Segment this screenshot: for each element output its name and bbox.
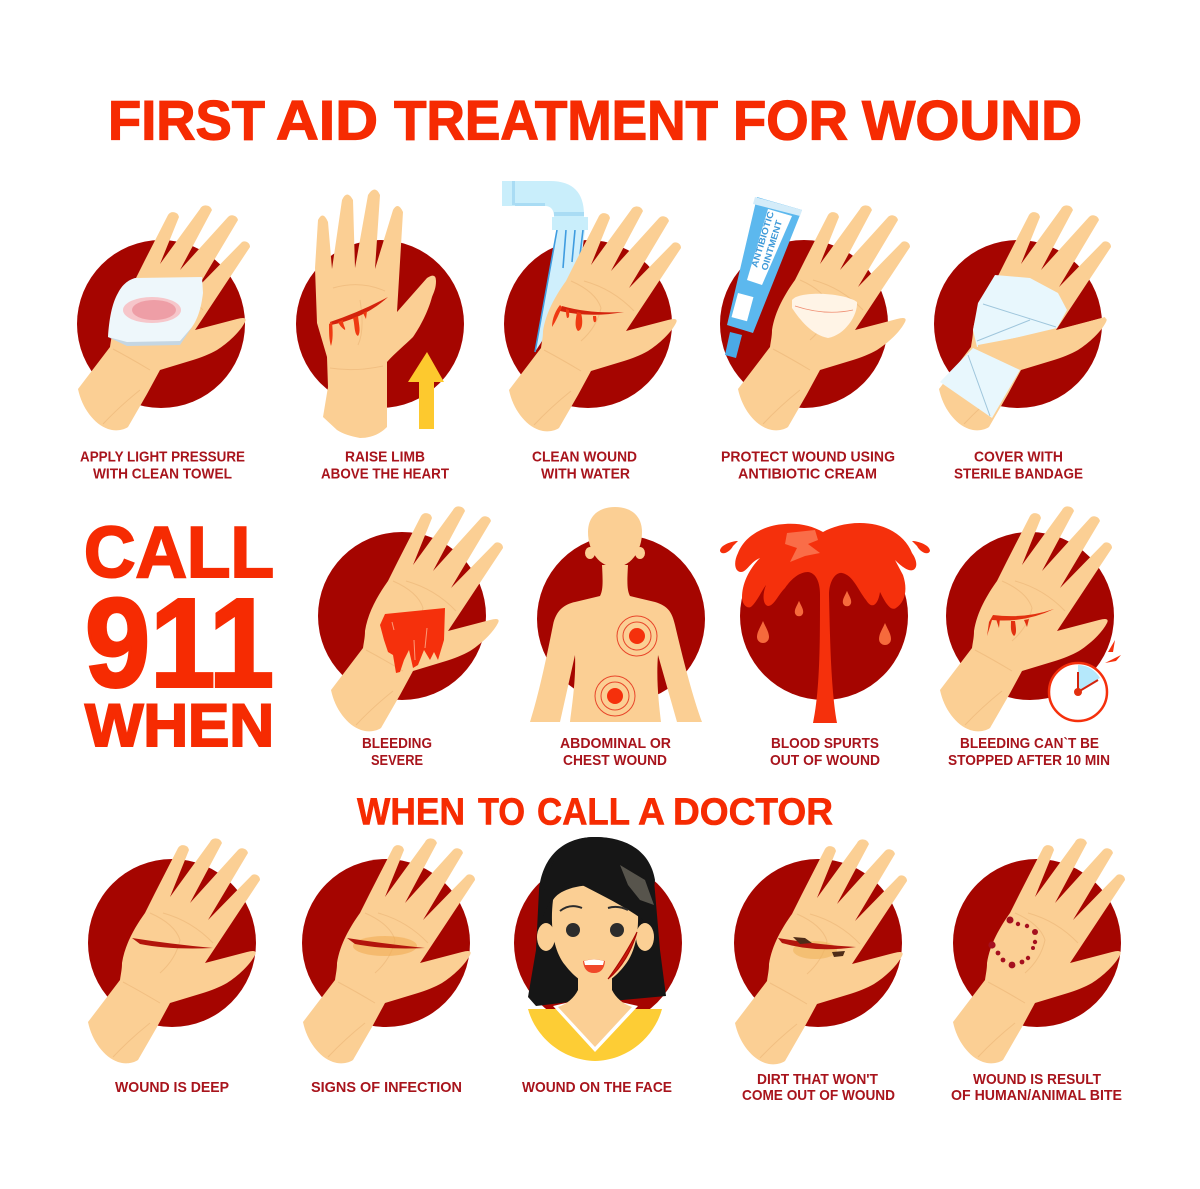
icon: hand: [735, 839, 907, 1064]
icon: ointment on palm: [792, 294, 857, 338]
icon: abdominal wound target: [595, 676, 635, 716]
icon: hand: [940, 506, 1112, 731]
section heading: when to call a doctor: A: [638, 792, 665, 834]
section heading: when to call a doctor: DOCTOR: [673, 792, 833, 834]
background circle: [296, 240, 464, 408]
wound with infection halo: [347, 936, 425, 956]
icon: hand: [303, 838, 475, 1063]
ears: [537, 923, 555, 951]
caption: BLEEDING: [362, 735, 432, 752]
icon: antibiotic tube: [725, 197, 802, 358]
panel: clean wound: [502, 181, 681, 482]
caption: WITH WATER: [541, 466, 630, 482]
title: [108, 88, 1082, 152]
caption: WOUND IS RESULT: [973, 1071, 1101, 1088]
icon: heavy blood: [380, 608, 445, 673]
yellow top: [528, 1009, 662, 1061]
wound with dirt: [778, 937, 856, 959]
panel: sterile bandage: [934, 205, 1111, 482]
title: TREATMENT: [394, 88, 718, 152]
call 911 heading: [84, 513, 274, 759]
title: FIRST: [108, 88, 265, 152]
caption: SEVERE: [371, 752, 423, 769]
section heading: when to call a doctor: WHEN: [357, 792, 465, 834]
caption: OF HUMAN/ANIMAL BITE: [951, 1087, 1122, 1104]
face: [552, 885, 638, 985]
call 911 heading: CALL: [84, 513, 274, 593]
icon: hand: [78, 205, 250, 430]
icon: hand: [953, 838, 1125, 1063]
panel: dirt in wound: [734, 839, 907, 1104]
caption: [770, 735, 880, 769]
wound: [552, 305, 624, 331]
call 911 heading: 911: [85, 572, 274, 714]
background circle: [720, 240, 888, 408]
background circle: [740, 532, 908, 700]
panel: bleeding cannot be stopped: [940, 506, 1121, 769]
caption: WITH CLEAN TOWEL: [93, 466, 232, 482]
icon: stopwatch: [1049, 640, 1121, 721]
caption: OUT OF WOUND: [770, 752, 880, 769]
section heading: when to call a doctor: TO: [478, 792, 525, 834]
title: AID: [276, 88, 378, 152]
caption: WOUND IS DEEP: [115, 1079, 229, 1096]
title: FOR: [733, 88, 848, 152]
caption: CLEAN WOUND: [532, 448, 637, 466]
caption: [560, 735, 671, 769]
icon: woman with facial wound: [528, 837, 666, 1061]
icon: water stream: [535, 230, 585, 352]
icon: wrist bandage: [940, 348, 1020, 418]
mouth: [583, 960, 605, 973]
icon: human torso: [530, 507, 702, 722]
hair back: [528, 837, 666, 1006]
caption: [80, 448, 245, 482]
section heading: when to call a doctor: CALL: [537, 792, 630, 834]
background circle: [953, 859, 1121, 1027]
icon: hand: [509, 206, 681, 431]
background circle: [514, 859, 682, 1027]
icon: bite marks: [988, 916, 1038, 968]
panel: abdominal or chest wound: [530, 507, 705, 769]
caption: [742, 1071, 895, 1104]
caption: DIRT THAT WON'T: [757, 1071, 878, 1088]
caption: STOPPED AFTER 10 MIN: [948, 752, 1110, 769]
caption: [321, 448, 449, 482]
caption: COME OUT OF WOUND: [742, 1087, 895, 1104]
caption: ABOVE THE HEART: [321, 466, 449, 482]
panel: bite wound: [951, 838, 1125, 1104]
facial cut: [608, 932, 637, 979]
caption: BLOOD SPURTS: [771, 735, 879, 752]
caption: WOUND ON THE FACE: [522, 1079, 672, 1096]
panel: bleeding severe: [318, 506, 503, 769]
caption: [948, 735, 1110, 769]
background circle: [77, 240, 245, 408]
background circle: [946, 532, 1114, 700]
icon: faucet: [502, 181, 588, 230]
background circle: [537, 535, 705, 703]
caption: ANTIBIOTIC CREAM: [738, 466, 877, 482]
neck and collar: [553, 1000, 638, 1052]
background circle: [88, 859, 256, 1027]
caption: SIGNS OF INFECTION: [311, 1079, 462, 1096]
background circle: [318, 532, 486, 700]
caption: APPLY LIGHT PRESSURE: [80, 448, 245, 466]
wound: [987, 609, 1054, 636]
arrow: [408, 352, 444, 429]
icon: hand: [88, 838, 260, 1063]
caption: BLEEDING CAN`T BE: [960, 735, 1099, 752]
wound: [132, 938, 213, 948]
fringe: [540, 837, 655, 925]
background circle: [302, 859, 470, 1027]
caption: RAISE LIMB: [345, 448, 425, 466]
panel: wound on the face: [514, 837, 682, 1096]
caption: [532, 448, 637, 482]
icon: chest wound target: [617, 616, 657, 656]
icon: antibiotic tube: OINTMENT: [759, 218, 784, 272]
icon: towel: [108, 277, 203, 346]
panel: blood spurts: [720, 523, 930, 769]
caption: CHEST WOUND: [563, 752, 667, 769]
caption: PROTECT WOUND USING: [721, 448, 895, 466]
caption: STERILE BANDAGE: [954, 466, 1083, 482]
panel: wound is deep: [88, 838, 260, 1096]
icon: antibiotic tube: ANTIBIOTIC: [749, 210, 776, 269]
caption: [362, 735, 432, 769]
icon: thumb over bandage: [978, 317, 1106, 368]
caption: ABDOMINAL OR: [560, 735, 671, 752]
icon: hand: [939, 205, 1111, 430]
call 911 heading: WHEN: [85, 692, 274, 759]
background circle: [934, 240, 1102, 408]
caption: COVER WITH: [974, 448, 1063, 466]
wound: [329, 297, 388, 346]
icon: upright hand: [315, 190, 436, 438]
icon: palm bandage: [973, 275, 1067, 347]
caption: [951, 1071, 1122, 1104]
section heading: when to call a doctor: [357, 792, 833, 834]
title: WOUND: [862, 88, 1082, 152]
icon: blood fountain: [720, 523, 930, 723]
icon: hand: [331, 506, 503, 731]
panel: raise limb: [296, 190, 464, 482]
eyes and brows: [566, 923, 580, 937]
caption: [954, 448, 1083, 482]
panel: apply light pressure: [77, 205, 250, 482]
background circle: [734, 859, 902, 1027]
icon: hand: [738, 205, 910, 430]
background circle: [504, 240, 672, 408]
panel: signs of infection: [302, 838, 475, 1096]
caption: [721, 448, 895, 482]
panel: protect wound: [720, 197, 910, 482]
